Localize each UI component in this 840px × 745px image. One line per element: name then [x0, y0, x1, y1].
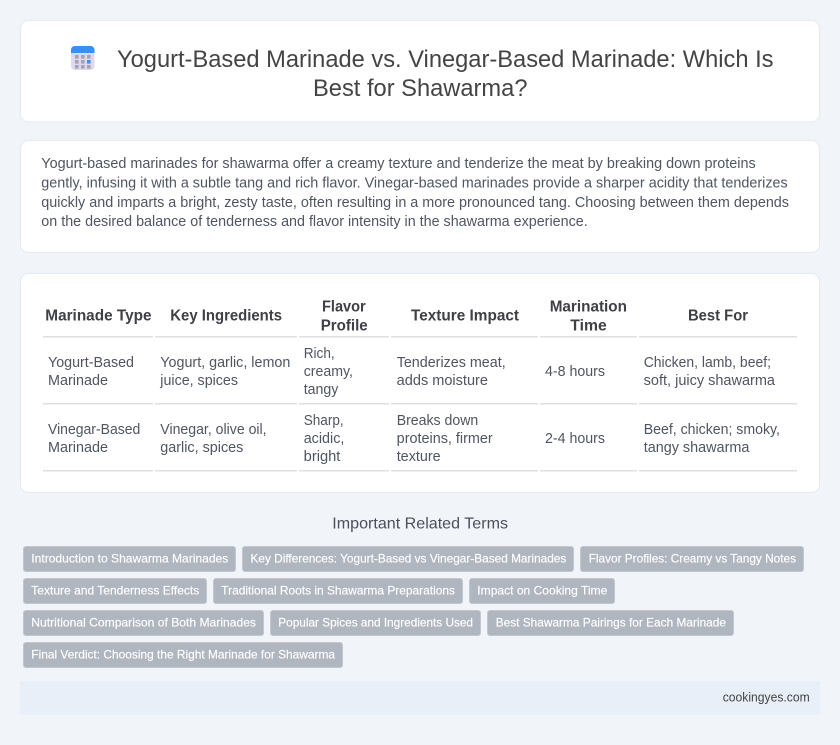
tag: cooking time: Impact on Cooking Time [477, 584, 608, 598]
intro text block: on the desired balance of tenderness and flavor intensity in the shawarma experience. [41, 214, 588, 230]
table header row: Texture Impact [411, 308, 519, 324]
table header row [43, 298, 797, 338]
table row: vinegar-based marinade: Marinade [48, 440, 108, 456]
tag: traditional roots [214, 578, 462, 604]
title: Best for Shawarma? [313, 75, 528, 102]
table row: yogurt-based marinade: juice, spices [159, 373, 238, 389]
table row: vinegar-based marinade [43, 413, 797, 472]
table header row: Profile [321, 318, 368, 334]
title [117, 46, 774, 102]
tag: texture: Texture and Tenderness Effects [31, 584, 199, 598]
table header row: Best For [688, 308, 748, 324]
table row: vinegar-based marinade: Vinegar-Based [48, 422, 140, 438]
tag: final verdict: Final Verdict: Choosing the Right Marinade for Shawarma [31, 648, 335, 662]
tag: flavor profiles [580, 546, 804, 572]
table row: yogurt-based marinade: adds moisture [397, 373, 488, 389]
table row: yogurt-based marinade: Chicken, lamb, beef; [644, 355, 771, 371]
table row: vinegar-based marinade: bright [304, 449, 340, 465]
table row: yogurt-based marinade: Tenderizes meat, [397, 355, 506, 371]
tag: best pairings [488, 610, 734, 636]
header panel [20, 20, 820, 122]
tag: introduction: Introduction to Shawarma Marinades [31, 552, 228, 566]
table row: yogurt-based marinade: Marinade [48, 373, 108, 389]
tag: best pairings: Best Shawarma Pairings for Each Marinade [496, 616, 726, 630]
tag: texture [24, 578, 206, 604]
title: Yogurt-Based Marinade vs. Vinegar-Based Marinade: Which Is [117, 46, 774, 73]
table row: yogurt-based marinade: Rich, [304, 346, 335, 362]
tag: key differences [242, 546, 574, 572]
table row: vinegar-based marinade: Sharp, [304, 413, 344, 429]
table header row: Marinade Type [45, 308, 152, 324]
tag: flavor profiles: Flavor Profiles: Creamy vs Tangy Notes [589, 552, 796, 566]
table header row: Marination [550, 298, 627, 316]
tag: nutritional comparison: Nutritional Comparison of Both Marinades [31, 616, 256, 630]
tag: introduction [24, 546, 236, 572]
panel: comparison table [20, 274, 820, 492]
intro text block: gently, infusing it with a subtle tang and rich flavor. Vinegar-based marinades provide a sharper acidity that tenderizes [41, 176, 788, 192]
intro text block: Yogurt-based marinades for shawarma offer a creamy texture and tenderize the meat by breaking down proteins [41, 156, 756, 172]
tag: key differences: Key Differences: Yogurt-Based vs Vinegar-Based Marinades [250, 552, 566, 566]
table row: yogurt-based marinade: creamy, [304, 364, 353, 380]
table row: vinegar-based marinade: acidic, [304, 431, 344, 447]
table row: yogurt-based marinade: soft, juicy shawarma [644, 373, 775, 389]
table row: vinegar-based marinade: proteins, firmer [397, 431, 493, 447]
table row: yogurt-based marinade: Yogurt, garlic, lemon [160, 355, 290, 371]
table row: yogurt-based marinade: Yogurt-Based [48, 355, 134, 371]
footer bar [20, 681, 820, 715]
table row: vinegar-based marinade: 2-4 hours [545, 431, 605, 447]
table row: yogurt-based marinade: tangy [304, 382, 339, 398]
intro text block: quickly and imparts a bright, zesty taste, often resulting in a more pronounced tang. Choosing between them depends [41, 195, 789, 211]
panel: intro paragraph [20, 140, 820, 252]
tag: popular spices: Popular Spices and Ingredients Used [278, 616, 473, 630]
table row: vinegar-based marinade: Vinegar, olive oil, [160, 422, 267, 438]
table row: vinegar-based marinade: tangy shawarma [644, 440, 749, 456]
table row: vinegar-based marinade: texture [397, 449, 441, 465]
table header row: Flavor [322, 298, 366, 316]
table row: yogurt-based marinade [43, 346, 797, 404]
table row: vinegar-based marinade: garlic, spices [160, 440, 243, 456]
heading: important related terms: Important Related Terms [332, 516, 508, 532]
table header row: Key Ingredients [170, 308, 282, 324]
tag: final verdict [24, 642, 342, 668]
table row: vinegar-based marinade: Beef, chicken; smoky, [644, 422, 780, 438]
tag: traditional roots: Traditional Roots in Shawarma Preparations [221, 584, 455, 598]
intro text block [41, 156, 789, 230]
table row: yogurt-based marinade: 4-8 hours [545, 364, 605, 380]
tag: cooking time [470, 578, 614, 604]
icon: calendar [71, 46, 94, 70]
table row: vinegar-based marinade: Breaks down [397, 413, 478, 429]
tag: nutritional comparison [24, 610, 264, 636]
tag: popular spices [270, 610, 480, 636]
related term tags [24, 546, 804, 668]
footer source text: cookingyes.com [723, 690, 810, 705]
table header row: Time [570, 318, 607, 334]
